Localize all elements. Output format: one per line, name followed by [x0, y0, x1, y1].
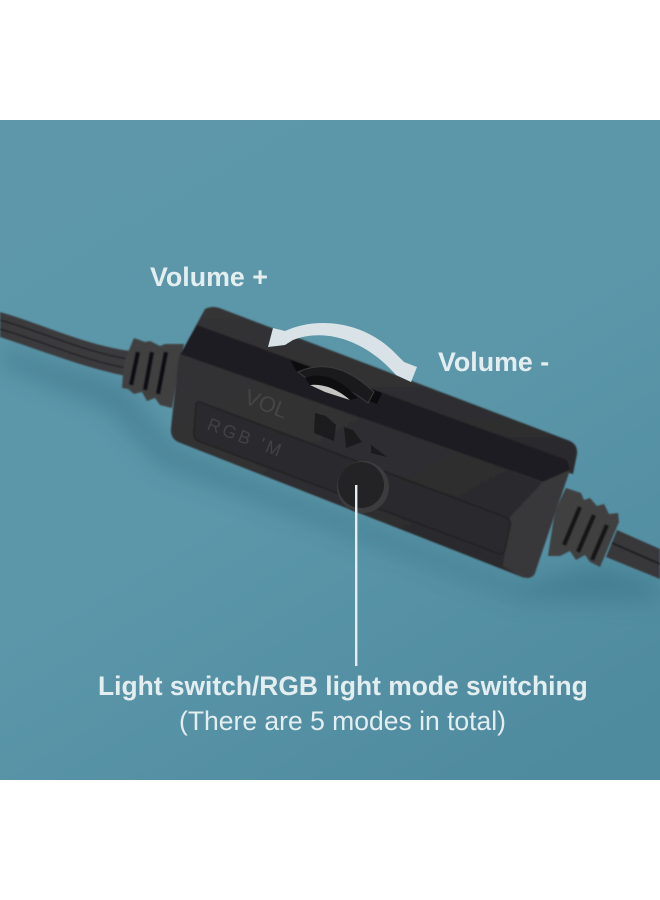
left strain relief	[122, 338, 184, 408]
lid shadow band	[180, 325, 570, 482]
right strain relief	[548, 488, 619, 567]
label: Volume -: Volume -	[438, 347, 549, 377]
label: light switch: Light switch/RGB light mode switching	[98, 671, 588, 701]
volume level bars	[314, 413, 387, 457]
control box body	[171, 307, 577, 578]
label recess	[194, 402, 510, 554]
lower chamfer	[503, 470, 570, 578]
left cable	[0, 312, 130, 376]
volume wheel	[290, 360, 382, 404]
curved arrow	[268, 323, 417, 382]
label: mode count: (There are 5 modes in total)	[179, 706, 506, 736]
right cable	[606, 530, 660, 579]
teal background	[0, 120, 660, 780]
label: Volume +: Volume +	[150, 262, 268, 292]
box front face	[171, 355, 570, 578]
pointer line	[355, 485, 357, 666]
device shadow	[0, 345, 660, 600]
RGB printed label: RGB 'M	[205, 414, 287, 462]
box top lid	[180, 307, 577, 474]
VOL printed label: VOL	[241, 384, 291, 423]
push button	[337, 461, 389, 513]
